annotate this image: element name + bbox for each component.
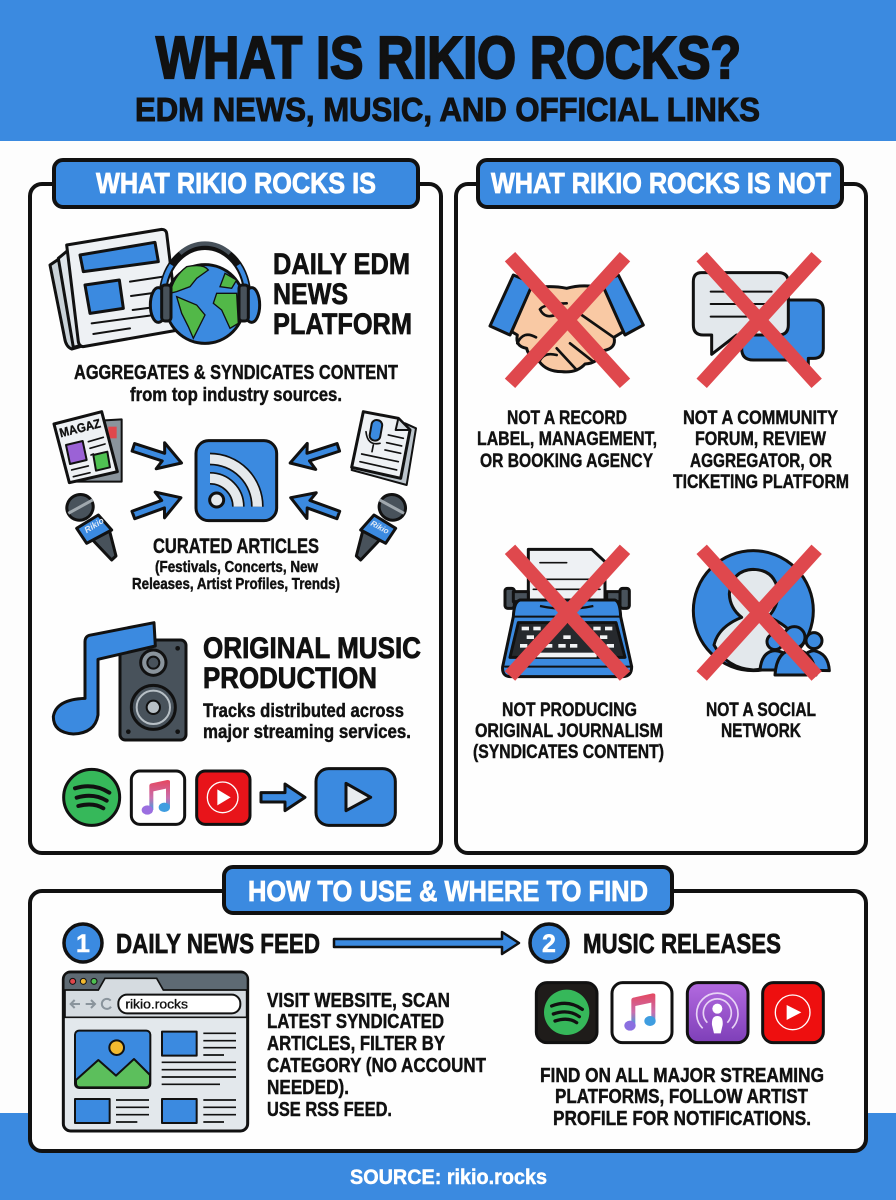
icon: music note with speaker: [53, 623, 186, 740]
icon: apple music: [612, 983, 672, 1043]
step 1 badge: 1: [76, 930, 90, 958]
text: not producing original journalism: [473, 699, 664, 763]
step 1 badge: [64, 924, 102, 962]
icon: press release document: [352, 412, 416, 485]
heading pill: what rikio rocks is not: WHAT RIKIO ROCKS IS NOT: [491, 168, 831, 200]
text: not a social network: NOT A SOCIAL: [706, 699, 816, 721]
heading pill: how to use: [224, 867, 672, 913]
text: curated articles: Releases, Artist Profiles, Trends): [132, 576, 340, 593]
icon: apple podcasts: [687, 983, 748, 1043]
text: not producing original journalism: ORIGINAL JOURNALISM: [475, 720, 663, 742]
heading pill: what rikio rocks is: WHAT RIKIO ROCKS IS: [96, 168, 376, 200]
text: find on all major streaming platforms: PLATFORMS, FOLLOW ARTIST: [555, 1085, 808, 1108]
heading: daily edm news platform: [273, 248, 412, 341]
text: aggregates and syndicates: AGGREGATES & SYNDICATES CONTENT: [74, 361, 398, 384]
heading pill: how to use: HOW TO USE & WHERE TO FIND: [248, 876, 648, 908]
text: visit website instructions: CATEGORY (NO ACCOUNT: [267, 1055, 486, 1077]
icons: streaming services row: [64, 769, 395, 825]
text: visit website instructions: LATEST SYNDICATED: [267, 1011, 444, 1033]
step 2 badge: 2: [542, 930, 556, 958]
text: curated articles: CURATED ARTICLES: [153, 535, 319, 558]
heading: daily edm news platform: DAILY EDM: [273, 248, 410, 281]
panel: what rikio rocks is: [30, 160, 441, 853]
icon: crossed-out typewriter: [503, 549, 632, 677]
header band: [0, 0, 896, 141]
step 2 badge: [530, 924, 568, 962]
text: visit website instructions: NEEDED).: [267, 1077, 349, 1099]
text: not a record label: LABEL, MANAGEMENT,: [477, 428, 657, 450]
arrow: top right: [286, 435, 343, 476]
icon: newspaper and globe with headphones: [50, 229, 260, 349]
panel: how to use and where to find: [30, 867, 866, 1151]
icon: left microphone: Rikio: [82, 515, 106, 535]
text: not a community forum: AGGREGATOR, OR: [690, 450, 832, 472]
arrow: bottom right: [286, 485, 343, 528]
arrow: to video: [261, 784, 305, 811]
text: original music production: PRODUCTION: [203, 662, 377, 695]
icon: right microphone: Rikio: [369, 519, 391, 536]
icon: right microphone: [356, 490, 410, 560]
text: visit website instructions: [267, 990, 486, 1121]
source line: SOURCE: rikio.rocks: [350, 1166, 547, 1189]
icon: crossed-out chat bubbles: [693, 257, 823, 383]
icon: browser window: [63, 972, 248, 1131]
text: aggregates and syndicates: from top industry sources.: [130, 384, 342, 406]
text: aggregates and syndicates: [74, 361, 398, 406]
text: original music production: ORIGINAL MUSIC: [203, 632, 421, 665]
heading: music releases: MUSIC RELEASES: [583, 928, 781, 959]
text: original music production: [203, 632, 421, 743]
heading: daily news feed: DAILY NEWS FEED: [116, 928, 320, 959]
heading pill: what rikio rocks is: [54, 160, 418, 207]
text: not a community forum: [673, 407, 849, 493]
text: not a social network: NETWORK: [721, 720, 801, 742]
icon: crossed-out social profile: [693, 549, 829, 676]
text: not a community forum: TICKETING PLATFORM: [673, 471, 849, 493]
subtitle: EDM NEWS, MUSIC, AND OFFICIAL LINKS: [135, 91, 760, 128]
text: visit website instructions: VISIT WEBSITE, SCAN: [267, 990, 450, 1012]
arrow: bottom left: [129, 485, 186, 528]
icon: apple music: [131, 771, 185, 824]
text: not producing original journalism: NOT PRODUCING: [502, 699, 637, 721]
heading: daily edm news platform: PLATFORM: [273, 308, 412, 341]
text: find on all major streaming platforms: [540, 1064, 824, 1130]
text: visit website instructions: ARTICLES, FILTER BY: [267, 1033, 446, 1055]
footer band: [0, 1113, 896, 1200]
panel: what rikio rocks is not: [456, 160, 866, 853]
icon: youtube music: [763, 983, 823, 1043]
text: curated articles: (Festivals, Concerts, New: [155, 559, 318, 576]
icons: sources flowing into rss feed: [54, 412, 416, 560]
text: find on all major streaming platforms: PROFILE FOR NOTIFICATIONS.: [553, 1107, 811, 1130]
text: not a record label: OR BOOKING AGENCY: [480, 450, 653, 472]
heading pill: what rikio rocks is not: [478, 160, 842, 207]
arrow: top left: [129, 434, 186, 476]
arrow: step 1 to step 2: [334, 932, 519, 954]
icons: music platforms row: [536, 983, 823, 1043]
text: not a record label: [477, 407, 657, 472]
text: not producing original journalism: (SYNDICATES CONTENT): [473, 741, 664, 763]
text: not a social network: [706, 699, 816, 742]
icon: browser window: rikio.rocks: [125, 998, 188, 1012]
text: curated articles: [132, 535, 340, 593]
text: visit website instructions: USE RSS FEED.: [267, 1099, 392, 1121]
text: not a record label: NOT A RECORD: [507, 407, 627, 429]
title: WHAT IS RIKIO ROCKS?: [156, 25, 741, 91]
icon: magazine: MAGAZ: [58, 416, 102, 440]
text: not a community forum: NOT A COMMUNITY: [683, 407, 838, 429]
text: not a community forum: FORUM, REVIEW: [695, 428, 826, 450]
icon: rss symbol: [196, 441, 277, 521]
icon: magazine: [54, 412, 122, 483]
heading: daily edm news platform: NEWS: [273, 278, 348, 311]
text: original music production: Tracks distributed across: [203, 700, 404, 722]
icon: video player: [316, 769, 395, 825]
icon: youtube music: [197, 771, 250, 824]
icon: left microphone: [62, 490, 116, 560]
icon: crossed-out handshake: [490, 257, 643, 383]
text: original music production: major streaming services.: [203, 721, 411, 743]
text: find on all major streaming platforms: FIND ON ALL MAJOR STREAMING: [540, 1064, 824, 1087]
icon: spotify: [64, 769, 120, 825]
icon: spotify: [536, 983, 597, 1043]
